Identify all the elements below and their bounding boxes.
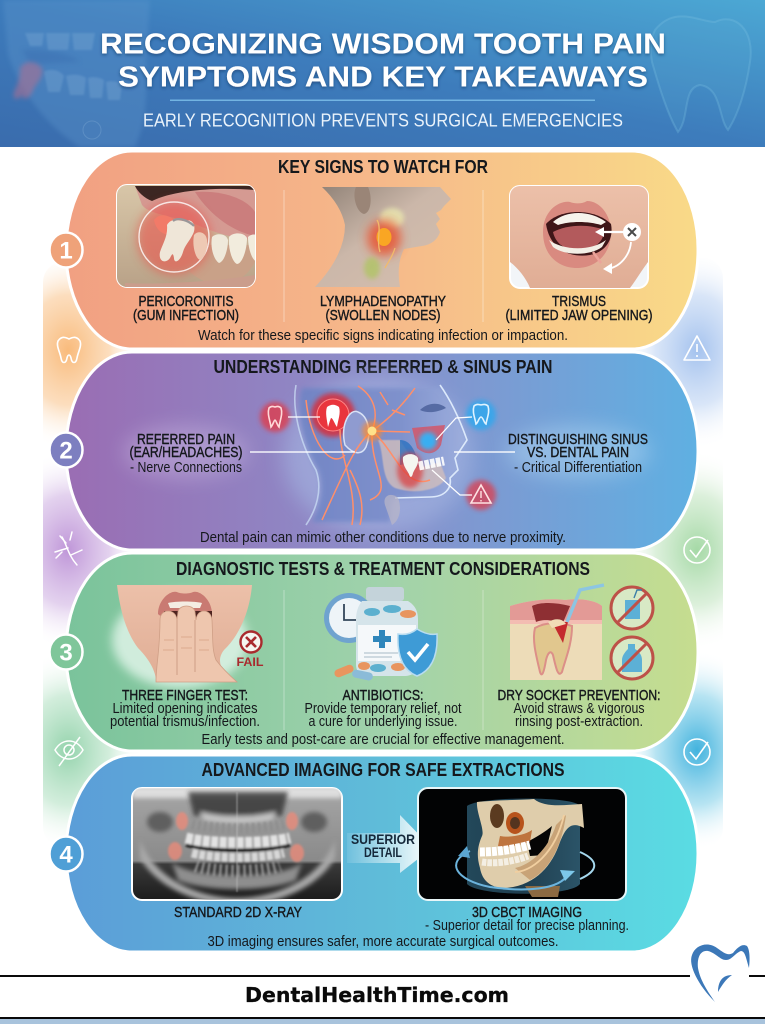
heading: diagnostic tests: DIAGNOSTIC TESTS & TREATMENT CONSIDERATIONS — [176, 559, 590, 579]
divider pair — [284, 190, 483, 322]
header banner — [0, 0, 765, 147]
illustration: dry socket — [510, 585, 653, 680]
icon: warning triangle — [684, 336, 710, 360]
image: 3D CBCT — [418, 788, 626, 900]
header decoration: faded jaw — [3, 0, 150, 147]
divider pair — [284, 590, 483, 730]
label: referred pain — [130, 432, 242, 476]
title: SYMPTOMS AND KEY TAKEAWAYS — [118, 62, 648, 94]
label: antibiotics: a cure for underlying issue. — [308, 714, 458, 730]
arrow: superior detail: DETAIL — [364, 844, 402, 860]
label: trismus — [506, 294, 652, 324]
panel 2: referred and sinus pain — [66, 352, 698, 550]
label: lymphadenopathy — [320, 294, 446, 324]
label: antibiotics: ANTIBIOTICS: — [342, 688, 424, 704]
label: lymphadenopathy: LYMPHADENOPATHY — [320, 294, 446, 310]
label: CBCT imaging — [425, 905, 629, 934]
label: referred pain: (EAR/HEADACHES) — [130, 445, 242, 461]
number badge 1 — [50, 232, 82, 268]
label: dry socket prevention: DRY SOCKET PREVENTION: — [498, 688, 660, 704]
icon: check circle middle — [684, 537, 710, 563]
icon: blue tooth — [436, 400, 496, 440]
illustration: three finger test — [112, 585, 252, 688]
illustration: head with nerves — [283, 377, 473, 533]
label: standard x-ray: STANDARD 2D X-RAY — [174, 905, 302, 921]
label: trismus: (LIMITED JAW OPENING) — [506, 308, 652, 324]
label: three finger test — [110, 688, 260, 730]
heading: referred pain: UNDERSTANDING REFERRED & SINUS PAIN — [214, 357, 552, 377]
label: dry socket prevention: rinsing post-extraction. — [515, 714, 643, 730]
side ribbon left — [43, 267, 128, 830]
number badge 3 — [50, 634, 82, 670]
icon: nerve branch — [55, 532, 82, 565]
subtitle: EARLY RECOGNITION PREVENTS SURGICAL EMERGENCIES — [143, 110, 623, 130]
illustration: trismus — [510, 186, 648, 288]
icon: red tooth — [260, 402, 320, 432]
panel 3: diagnostic tests — [66, 553, 698, 751]
pointer line: left — [250, 451, 355, 453]
icon: fail: FAIL — [236, 657, 264, 669]
label: referred pain: REFERRED PAIN — [137, 432, 235, 448]
logo: tooth — [691, 944, 750, 1002]
label: sinus vs dental: - Critical Differentiation — [514, 460, 642, 476]
caption: panel 1: Watch for these specific signs indicating infection or impaction. — [198, 328, 568, 344]
label: pericoronitis: (GUM INFECTION) — [133, 308, 239, 324]
icon: tooth outline — [57, 337, 81, 362]
title divider — [170, 100, 595, 101]
label: pericoronitis: PERICORONITIS — [138, 294, 234, 310]
label: antibiotics — [304, 688, 462, 730]
footer website: DentalHealthTime.com — [245, 983, 509, 1007]
image: 2D x-ray — [132, 786, 342, 905]
icon: warning — [432, 470, 496, 510]
label: referred pain: - Nerve Connections — [130, 460, 242, 476]
illustration: swollen neck nodes — [315, 187, 451, 287]
label: sinus vs dental: DISTINGUISHING SINUS — [508, 432, 648, 448]
bottom colour strip — [0, 1019, 765, 1024]
icon: check circle lower — [684, 739, 710, 765]
pointer line: right — [454, 451, 515, 453]
title — [100, 28, 666, 94]
label: lymphadenopathy: (SWOLLEN NODES) — [326, 308, 440, 324]
heading: advanced imaging: ADVANCED IMAGING FOR SAFE EXTRACTIONS — [202, 760, 564, 780]
header decoration: faint tooth outline — [651, 16, 751, 132]
side ribbon right — [634, 271, 723, 834]
glow behind labels — [124, 426, 650, 478]
illustration: antibiotics — [324, 587, 437, 681]
number badge 1: 1 — [59, 238, 73, 264]
panel 4: advanced imaging — [66, 755, 698, 952]
label: three finger test: THREE FINGER TEST: — [122, 688, 248, 704]
arrow: superior detail: SUPERIOR — [351, 831, 415, 847]
label: dry socket prevention — [498, 688, 660, 730]
label: three finger test: Limited opening indicates — [112, 701, 258, 717]
label: CBCT imaging: 3D CBCT IMAGING — [472, 905, 582, 921]
number badge 3: 3 — [59, 640, 73, 666]
icon: fail — [236, 632, 264, 669]
label: pericoronitis — [133, 294, 239, 324]
title: RECOGNIZING WISDOM TOOTH PAIN — [100, 28, 666, 60]
footer rule top — [0, 975, 765, 977]
number badge 2 — [50, 432, 82, 468]
label: sinus vs dental — [508, 432, 648, 476]
illustration: pericoronitis — [117, 185, 258, 287]
heading: key signs: KEY SIGNS TO WATCH FOR — [278, 157, 488, 177]
icon: crossed eye — [55, 737, 83, 766]
caption: panel 4: 3D imaging ensures safer, more accurate surgical outcomes. — [208, 934, 558, 950]
caption: panel 2: Dental pain can mimic other conditions due to nerve proximity. — [200, 530, 566, 546]
panel 1: key signs — [66, 151, 698, 349]
footer rule bottom — [0, 1017, 765, 1019]
label: three finger test: potential trismus/infection. — [110, 714, 260, 730]
label: CBCT imaging: - Superior detail for precise planning. — [425, 918, 629, 934]
label: dry socket prevention: Avoid straws & vigorous — [514, 701, 644, 717]
number badge 4 — [50, 836, 82, 872]
number badge 4: 4 — [59, 842, 73, 868]
number badge 2: 2 — [59, 438, 73, 464]
arrow: superior detail — [347, 815, 432, 873]
label: sinus vs dental: VS. DENTAL PAIN — [527, 445, 629, 461]
caption: panel 3: Early tests and post-care are crucial for effective management. — [202, 732, 564, 748]
label: trismus: TRISMUS — [552, 294, 606, 310]
label: antibiotics: Provide temporary relief, not — [304, 701, 462, 717]
